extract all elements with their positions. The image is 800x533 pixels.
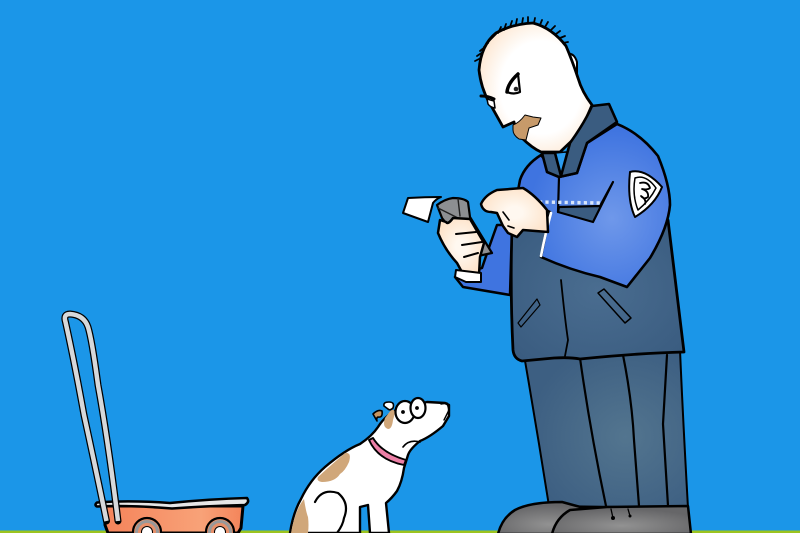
- trouser creases: [580, 355, 668, 506]
- wagon wheels: [133, 518, 234, 533]
- ground strip: [0, 530, 800, 533]
- officer trousers: [524, 350, 688, 508]
- wagon handle: [65, 314, 118, 521]
- moustache: [513, 115, 541, 140]
- reflective strip: [539, 202, 601, 203]
- officer shoes: [498, 502, 691, 533]
- shirt cuff: [455, 270, 481, 282]
- dog ear: [373, 410, 382, 421]
- wagon: [65, 314, 248, 533]
- shoulder badge: [629, 171, 662, 217]
- paper slip: [403, 197, 441, 222]
- ear: [566, 54, 577, 74]
- jacket pockets: [518, 299, 540, 327]
- shirt collar gap: [555, 152, 575, 176]
- hair stubble: [475, 17, 568, 61]
- jacket blue chest and near sleeve: [517, 124, 670, 287]
- dog hind leg: [315, 492, 346, 533]
- white sleeve edge: [541, 213, 551, 256]
- dog body and head: [290, 402, 449, 533]
- pointing hand: [481, 188, 548, 237]
- holding hand: [438, 218, 484, 275]
- officer head: [475, 17, 592, 152]
- near eye and brow: [487, 99, 495, 108]
- dog nose and mouth: [441, 403, 449, 420]
- dog tan patches: [291, 410, 395, 533]
- far eye and brow: [507, 74, 520, 94]
- wagon body: [104, 506, 243, 533]
- officer: [403, 17, 691, 533]
- jacket dark wedge: [558, 182, 613, 222]
- ticket book: [437, 198, 492, 257]
- dog eyes: [396, 401, 414, 423]
- head shape: [479, 23, 592, 152]
- officer jacket: [511, 220, 684, 361]
- dog: [290, 398, 449, 533]
- jacket collar: [542, 104, 617, 177]
- dog collar: [369, 438, 406, 465]
- far sleeve: [455, 225, 512, 295]
- wagon rim: [96, 498, 248, 508]
